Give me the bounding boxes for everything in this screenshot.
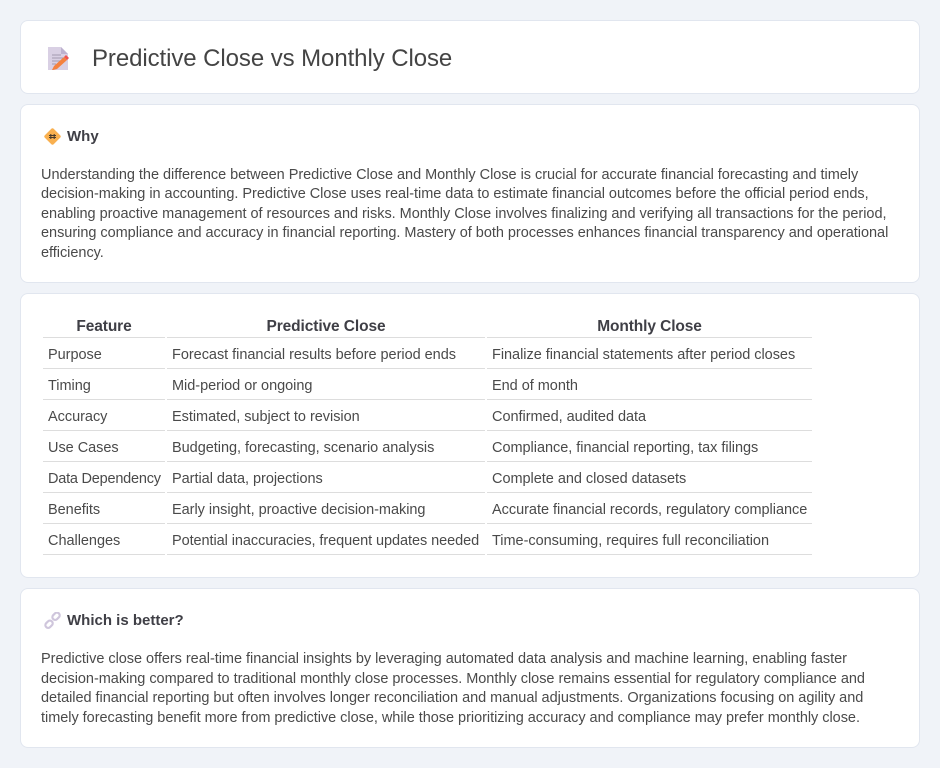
comparison table	[43, 318, 812, 555]
comparison table: Partial data, projections	[172, 470, 323, 486]
text block: why: efficiency.	[41, 245, 104, 261]
comparison table: Estimated, subject to revision	[172, 408, 360, 424]
text block: which is better	[41, 651, 865, 726]
icon: chain link	[44, 612, 61, 629]
comparison table: Feature	[76, 318, 132, 335]
comparison table: Mid-period or ongoing	[172, 378, 312, 394]
title: Predictive Close vs Monthly Close	[92, 45, 452, 72]
panel: why	[20, 104, 920, 283]
icon: document with pencil	[48, 47, 69, 70]
comparison table: Data Dependency	[48, 470, 161, 486]
panel: title header	[20, 20, 920, 94]
text block: why	[41, 167, 888, 261]
text block: why: decision-making in accounting. Predictive Close uses real-time data to estimate financial outcomes before the official period ends,	[41, 186, 869, 202]
text block: which is better: timely forecasting benefit more from predictive close, while those prioritizing accuracy and compliance may prefer monthly close.	[41, 710, 860, 726]
comparison table: Potential inaccuracies, frequent updates needed	[172, 532, 479, 548]
text block: which is better: Predictive close offers real-time financial insights by leveraging automated data analysis and machine learning, enabling faster	[41, 651, 847, 667]
panel: which is better	[20, 588, 920, 748]
comparison table: Budgeting, forecasting, scenario analysis	[172, 440, 434, 456]
comparison table: Use Cases	[48, 440, 119, 456]
text block: why: enabling proactive management of resources and risks. Monthly Close involves finalizing and verifying all transactions for the period,	[41, 206, 886, 222]
panel: comparison table	[20, 293, 920, 578]
comparison table: End of month	[492, 378, 578, 394]
comparison table: Forecast financial results before period ends	[172, 346, 456, 362]
comparison table: Purpose	[48, 346, 102, 362]
comparison table: Confirmed, audited data	[492, 408, 646, 424]
comparison table: Finalize financial statements after period closes	[492, 346, 795, 362]
comparison table: Compliance, financial reporting, tax filings	[492, 440, 758, 456]
heading: why: Why	[67, 128, 99, 145]
comparison table: Predictive Close	[266, 318, 386, 335]
text block: why: Understanding the difference between Predictive Close and Monthly Close is crucial for accurate financial forecasting and timely	[41, 167, 858, 183]
icon: warning diamond	[44, 128, 61, 145]
comparison table: Timing	[48, 378, 91, 394]
comparison table: Accurate financial records, regulatory compliance	[492, 502, 807, 518]
text block: which is better: detailed financial reporting but often involves longer reconciliation and manual adjustments. Organizations focusing on agility and	[41, 690, 863, 706]
heading: which is better: Which is better?	[67, 612, 184, 629]
comparison table: Benefits	[48, 502, 100, 518]
comparison table: Early insight, proactive decision-making	[172, 502, 425, 518]
comparison table: Monthly Close	[597, 318, 702, 335]
comparison table: Complete and closed datasets	[492, 470, 686, 486]
comparison table: Challenges	[48, 532, 120, 548]
text block: why: ensuring compliance and accuracy in financial reporting. Mastery of both processes enhances financial transparency and operational	[41, 225, 888, 241]
comparison table: Accuracy	[48, 408, 107, 424]
comparison table: Time-consuming, requires full reconciliation	[492, 532, 769, 548]
text block: which is better: decision-making compared to traditional monthly close processes. Monthly close remains essential for regulatory compliance and	[41, 671, 865, 687]
